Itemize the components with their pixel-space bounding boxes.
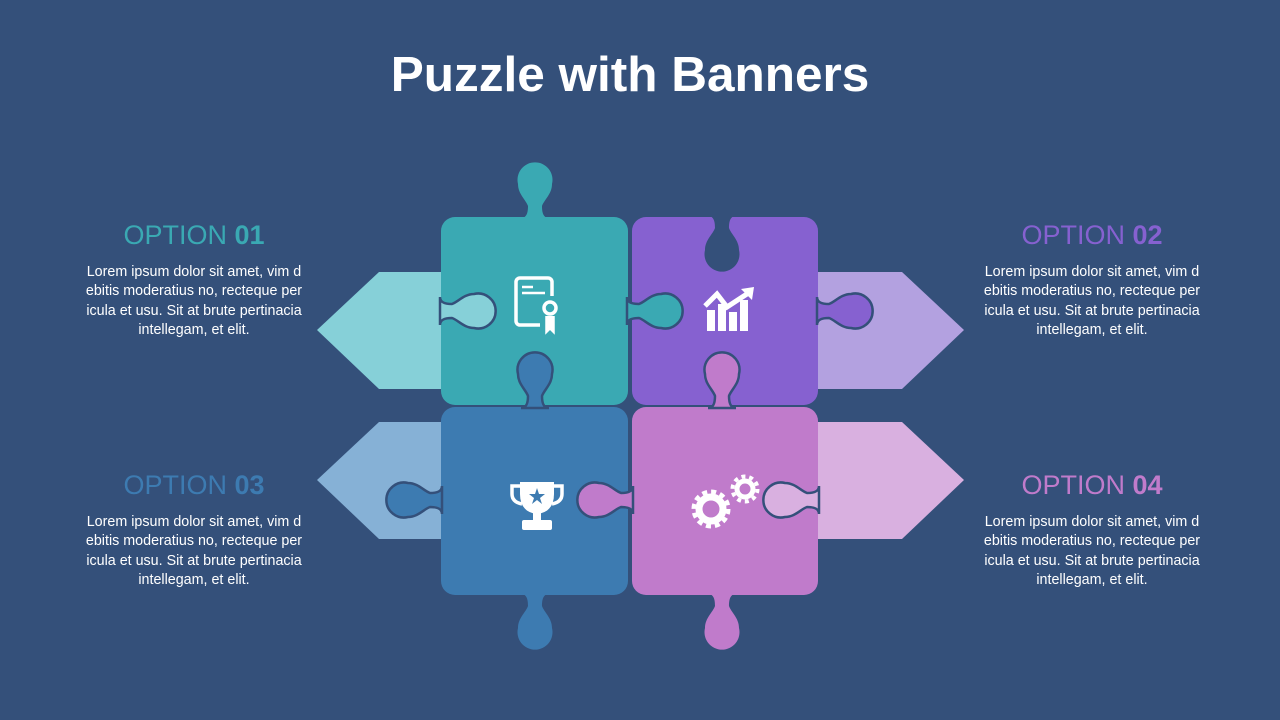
banner: option 03 [317,422,445,539]
text: option 04: Lorem ipsum dolor sit amet, vim d [985,514,1199,530]
text: option 04: ebitis moderatius no, recteque per [984,533,1200,549]
heading: option 03: OPTION 03 [123,470,265,500]
text: option 01: intellegam, et elit. [138,322,250,338]
text: option 02: Lorem ipsum dolor sit amet, vim d [985,264,1199,280]
text: option 03: Lorem ipsum dolor sit amet, vim d [87,514,301,530]
text: option 01: Lorem ipsum dolor sit amet, vim d [87,264,301,280]
banner: option 01 [317,272,445,389]
text: option 04 [984,514,1200,588]
text: option 02 [984,264,1200,338]
heading: option 02: OPTION 02 [1021,220,1163,250]
text: option 01: icula et usu. Sit at brute pertinacia [86,303,302,319]
text: option 03 [86,514,302,588]
title: Puzzle with Banners [391,47,869,102]
text: option 03: ebitis moderatius no, recteque per [86,533,302,549]
heading: option 04: OPTION 04 [1021,470,1163,500]
icon: trophy [512,482,562,530]
banner: option 04 [814,422,964,539]
text: option 01: ebitis moderatius no, recteque per [86,283,302,299]
icon: certificate [516,278,556,333]
text: option 02: intellegam, et elit. [1036,322,1148,338]
text: option 03: icula et usu. Sit at brute pertinacia [86,553,302,569]
piece: pink [632,407,818,650]
banner: option 02 [814,272,964,389]
text: option 04: intellegam, et elit. [1036,572,1148,588]
text: option 04: icula et usu. Sit at brute pertinacia [984,553,1200,569]
heading: option 01: OPTION 01 [123,220,265,250]
text: option 02: ebitis moderatius no, recteque per [984,283,1200,299]
connecting knobs [386,294,873,518]
text: option 01 [86,264,302,338]
text: option 02: icula et usu. Sit at brute pertinacia [984,303,1200,319]
piece: teal [441,162,628,405]
icon: gears [694,476,758,526]
text: option 03: intellegam, et elit. [138,572,250,588]
piece: purple [632,216,818,405]
piece: blue [441,407,628,650]
icon: growth chart [705,287,754,331]
